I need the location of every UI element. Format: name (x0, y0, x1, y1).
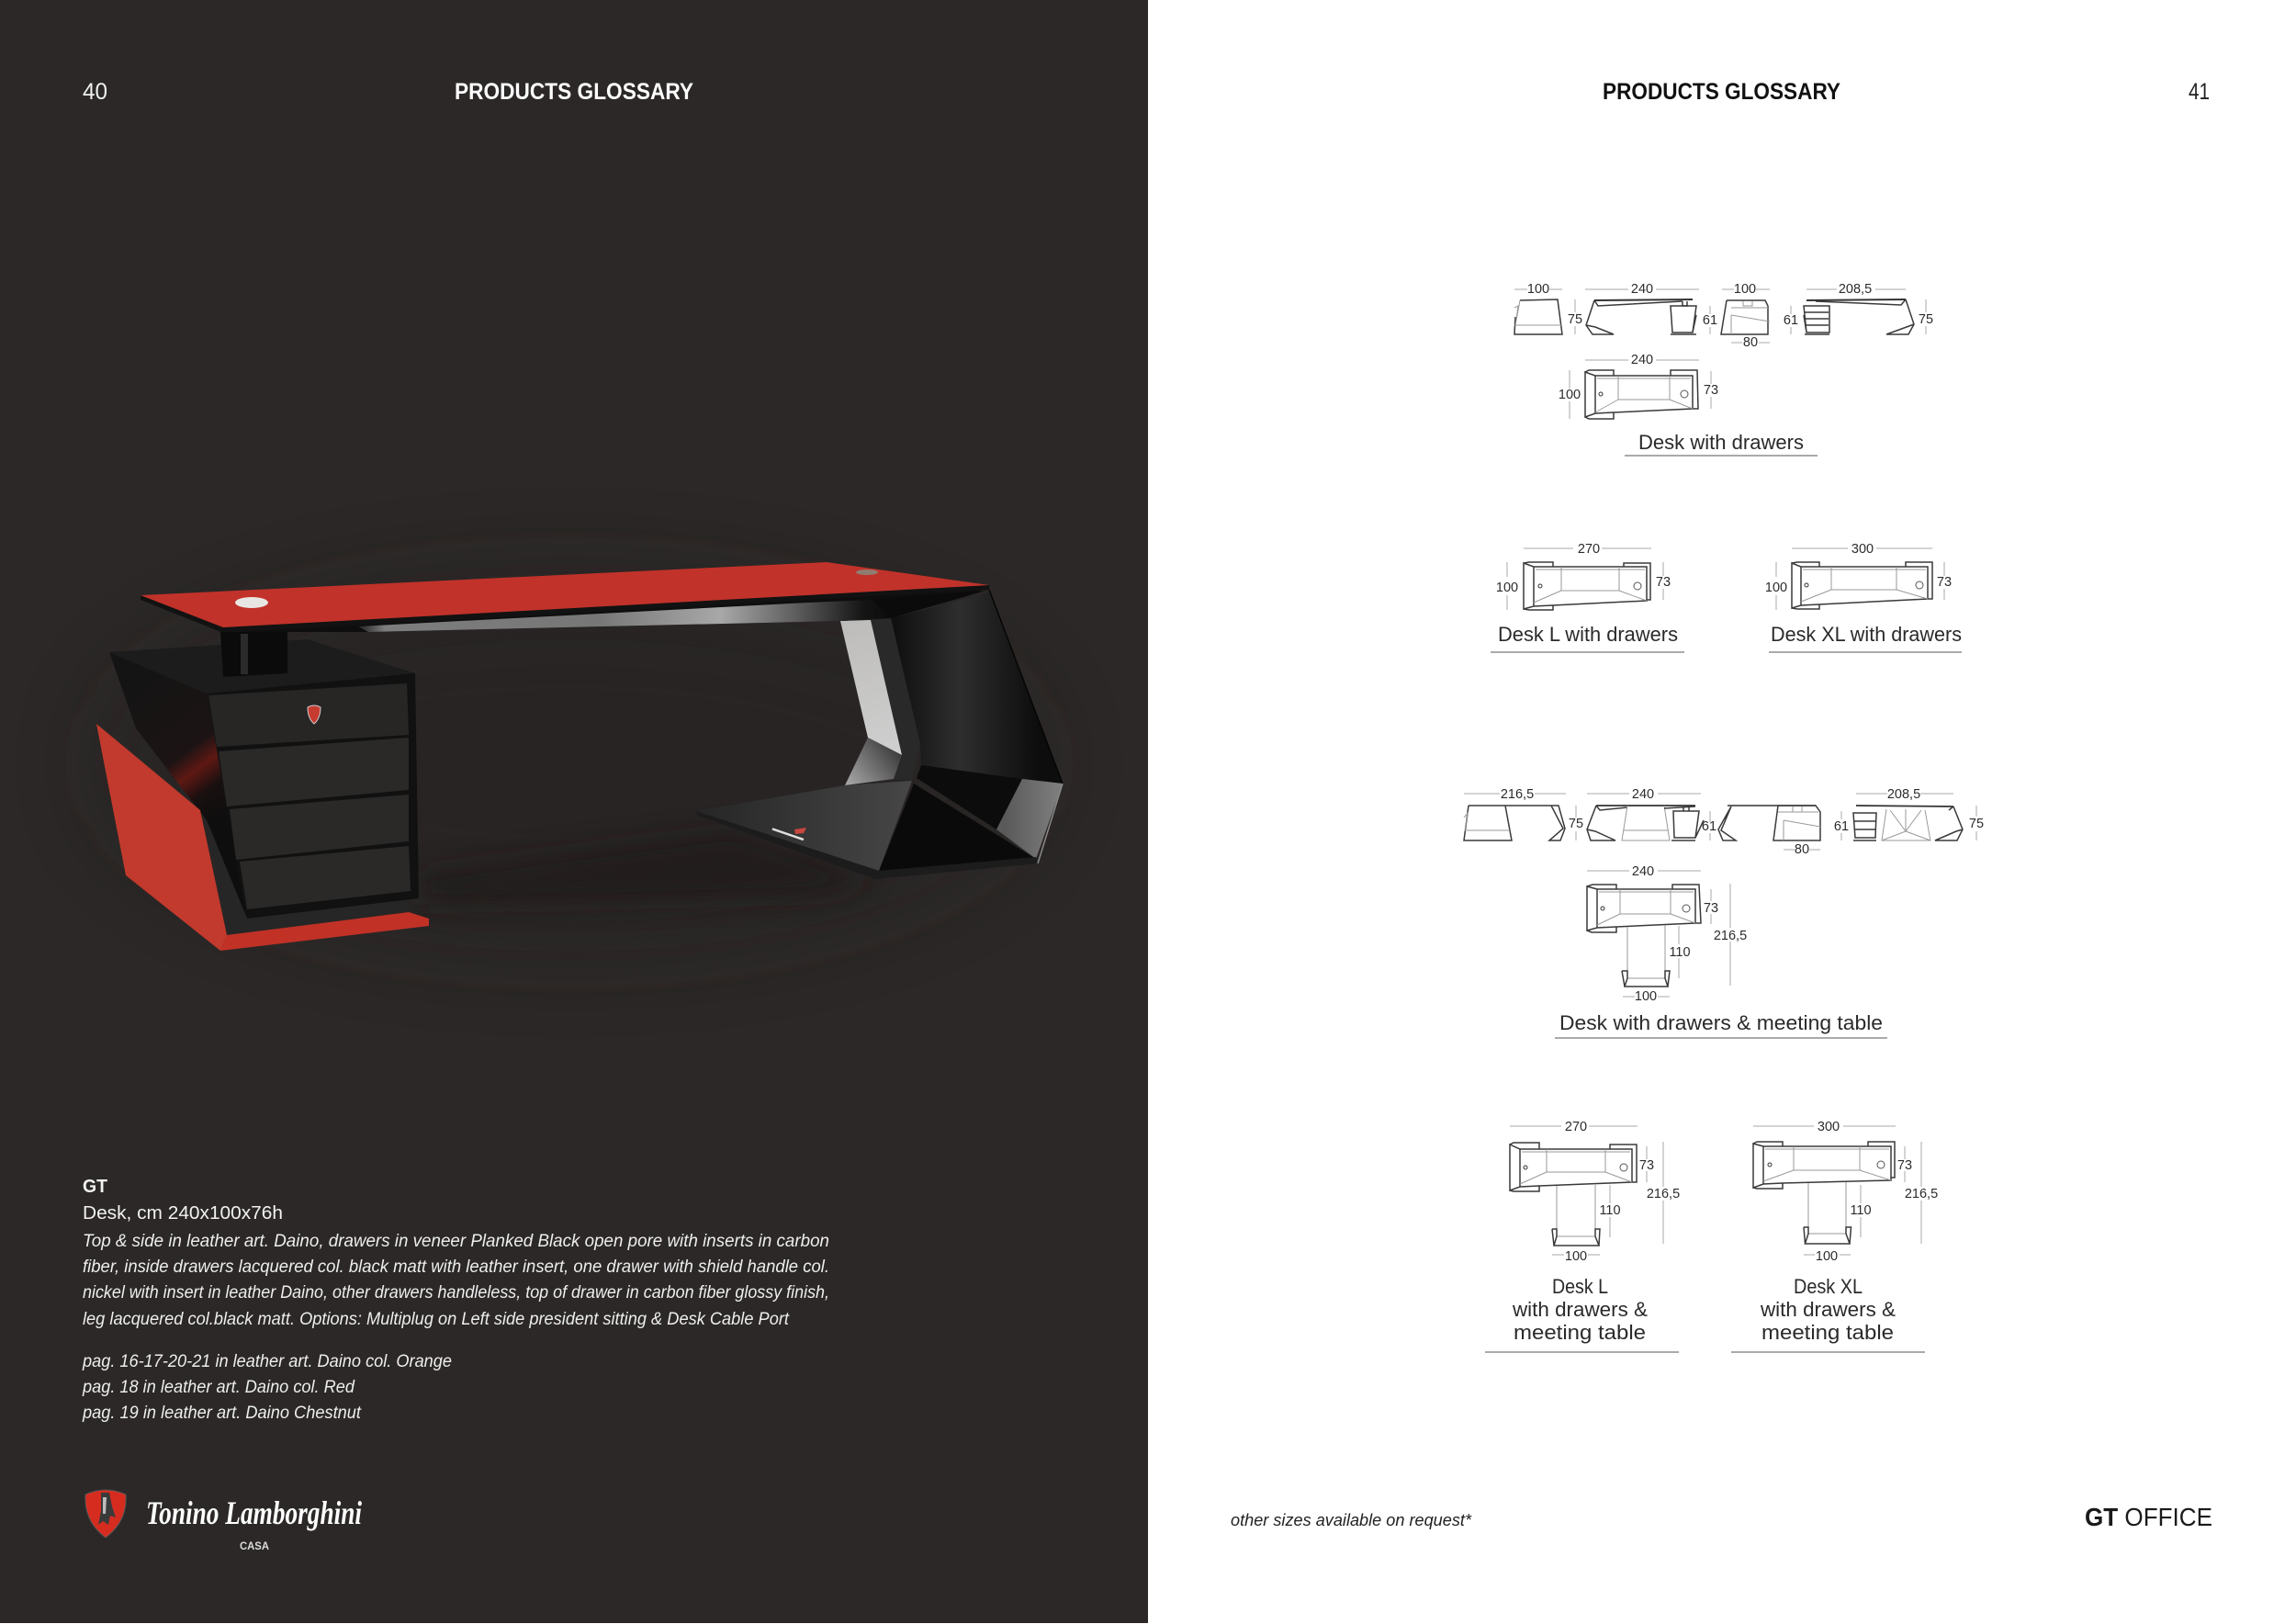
panel: desk with drawers and meeting table (1464, 787, 1984, 1038)
casa label: CASA (240, 1539, 269, 1552)
drawing: rear elevation: 75 (1919, 312, 1933, 327)
drawing: side elevation: 61 (1702, 819, 1716, 834)
drawing: plan view with table: 110 (1599, 1203, 1621, 1218)
drawing: plan view with table (1587, 864, 1747, 1004)
drawing: rear elevation (1784, 282, 1933, 334)
desk top edge (141, 585, 989, 633)
drawing: end view with cabinet: 100 (1734, 282, 1756, 297)
drawing: end elevation (1718, 806, 1820, 857)
icon: shield with bull (85, 1490, 126, 1538)
drawing: rear elevation: 75 (1969, 817, 1984, 831)
drawing: plan view with table (1510, 1120, 1680, 1264)
drawing: plan view with table: 73 (1639, 1158, 1654, 1173)
product size: Desk, cm 240x100x76h (83, 1203, 283, 1224)
drawing: plan view: 100 (1765, 581, 1787, 595)
drawing: front view: 75 (1568, 312, 1582, 327)
caption: with drawers & (1512, 1298, 1648, 1321)
drawing: plan view: 73 (1704, 383, 1718, 398)
product photo: GT desk (96, 562, 1063, 951)
drawing: rear elevation: 61 (1784, 313, 1798, 328)
drawing: plan view with table: 100 (1635, 989, 1657, 1004)
floor vignette (110, 588, 1029, 937)
drawing: plan view: 73 (1937, 575, 1952, 590)
panel: desk L with drawers (1491, 542, 1684, 652)
drawing: side elevation (1587, 787, 1716, 840)
drawing: side elevation: 240 (1631, 282, 1653, 297)
caption: meeting table (1761, 1321, 1894, 1344)
drawing: plan view: 300 (1851, 542, 1874, 557)
panel: desk L with meeting table (1485, 1120, 1680, 1352)
heading right: PRODUCTS GLOSSARY (1603, 79, 1840, 105)
drawing: plan view with table (1753, 1120, 1938, 1264)
description lines: Top & side in leather art. Daino, drawers in veneer Planked Black open pore with inserts in carbon (83, 1231, 829, 1251)
product name: GT (83, 1177, 107, 1197)
drawer 4 (240, 846, 411, 909)
description lines: nickel with insert in leather Daino, other drawers handleless, top of drawer in carbon fiber glossy finish, (83, 1282, 829, 1303)
section label: GT Office: GT OFFICE (2085, 1503, 2212, 1531)
description lines: leg lacquered col.black matt. Options: Multiplug on Left side president sitting & Desk Cable Port (83, 1309, 790, 1329)
drawing: end view with cabinet: 80 (1743, 335, 1758, 350)
drawing: plan view with table: 216,5 (1714, 929, 1747, 943)
drawing: front view: 100 (1527, 282, 1549, 297)
drawing: rear elevation: 208,5 (1887, 787, 1920, 802)
drawing: plan view (1765, 542, 1952, 610)
panel: dark left page (0, 0, 1148, 1623)
cable port discs (235, 597, 268, 608)
cabinet side (109, 652, 247, 919)
mesh carbon strip (207, 820, 409, 935)
caption: meeting table (1514, 1321, 1646, 1344)
page number left: 40 (83, 79, 107, 105)
panel: desk with drawers (1514, 282, 1933, 456)
floor shadow (419, 831, 877, 905)
caption (1731, 1275, 1925, 1352)
caption: Desk L (1552, 1275, 1608, 1298)
drawing: end view with cabinet (1721, 282, 1770, 350)
drawing: plan view with table: 216,5 (1647, 1187, 1680, 1201)
drawing: plan view with table: 270 (1565, 1120, 1587, 1134)
drawing: plan view with table: 110 (1669, 945, 1691, 960)
support post (220, 632, 287, 677)
cabinet front (207, 673, 419, 919)
desk leg: lower facet (845, 738, 902, 785)
floor logo (771, 828, 806, 840)
heading left: PRODUCTS GLOSSARY (455, 79, 693, 105)
desk top in red leather (141, 562, 989, 627)
drawing: plan view with table: 240 (1632, 864, 1654, 879)
red base (220, 912, 429, 951)
desk leg: inner dark panel (917, 765, 1022, 829)
brand wordmark: Tonino Lamborghini (146, 1494, 362, 1531)
caption: Desk L with drawers (1498, 623, 1678, 646)
drawing: plan view with table: 73 (1897, 1158, 1912, 1173)
desk beam underside (223, 588, 989, 632)
desk leg: shiny facet (996, 779, 1063, 859)
page references (82, 1351, 452, 1423)
caption: Desk with drawers (1638, 431, 1804, 454)
drawing: plan view: 270 (1578, 542, 1600, 557)
caption: with drawers & (1760, 1298, 1896, 1321)
drawing: front view: 75 (1569, 817, 1583, 831)
desk leg: tall black panel (891, 592, 1063, 784)
drawing: end elevation: 80 (1795, 842, 1809, 857)
drawing: rear elevation: 208,5 (1839, 282, 1872, 297)
drawing: plan view with table: 73 (1704, 901, 1718, 916)
drawing: front view (1464, 787, 1583, 840)
drawing: front view (1514, 282, 1582, 334)
drawing: rear elevation: 61 (1834, 819, 1849, 834)
caption (1485, 1275, 1679, 1352)
drawing: plan view with table: 216,5 (1905, 1187, 1938, 1201)
desk foot plate (696, 781, 912, 871)
footnote: other sizes available on request* (1231, 1510, 1472, 1529)
logo: Tonino Lamborghini Casa (85, 1490, 362, 1552)
drawer 3 (230, 795, 409, 860)
caption: Desk with drawers & meeting table (1559, 1011, 1883, 1034)
drawer 1 (208, 683, 409, 747)
shield handle (308, 705, 321, 724)
drawing: plan view with table: 100 (1816, 1249, 1838, 1264)
description lines: fiber, inside drawers lacquered col. black matt with leather insert, one drawer with shield handle col. (83, 1257, 829, 1277)
drawing: plan view with table: 100 (1565, 1249, 1587, 1264)
cabinet top (109, 639, 415, 694)
drawing: plan view: 100 (1559, 388, 1581, 402)
desk leg: floor triangle (879, 784, 1036, 871)
drawer 2 (219, 738, 409, 806)
page references: pag. 19 in leather art. Daino Chestnut (82, 1403, 362, 1423)
drawing: front view: 216,5 (1501, 787, 1534, 802)
drawing: plan view: 100 (1496, 581, 1518, 595)
page references: pag. 16-17-20-21 in leather art. Daino col. Orange (82, 1351, 452, 1371)
drawing: plan view (1559, 353, 1718, 419)
caption: Desk XL (1794, 1275, 1863, 1298)
panel: desk XL with drawers (1765, 542, 1962, 652)
desk leg: silver strip (840, 620, 902, 755)
page number right: 41 (2189, 79, 2210, 105)
drawing: plan view: 240 (1631, 353, 1653, 367)
drawing: side elevation: 240 (1632, 787, 1654, 802)
desk leg: dark strip (871, 618, 920, 781)
red side panel (96, 724, 227, 951)
drawing: plan view (1496, 542, 1671, 610)
description lines (83, 1231, 829, 1329)
drawing: plan view with table: 110 (1850, 1203, 1872, 1218)
text block: product description (82, 1177, 829, 1423)
panel: white right page (1148, 0, 2296, 1624)
drawing: plan view: 73 (1656, 575, 1671, 590)
panel: desk XL with meeting table (1731, 1120, 1938, 1352)
caption: Desk XL with drawers (1771, 623, 1962, 646)
drawing: rear elevation (1834, 787, 1984, 840)
drawing: side elevation: 61 (1703, 313, 1717, 328)
drawing: plan view with table: 300 (1818, 1120, 1840, 1134)
drawing: side elevation (1585, 282, 1717, 334)
page references: pag. 18 in leather art. Daino col. Red (82, 1377, 355, 1397)
